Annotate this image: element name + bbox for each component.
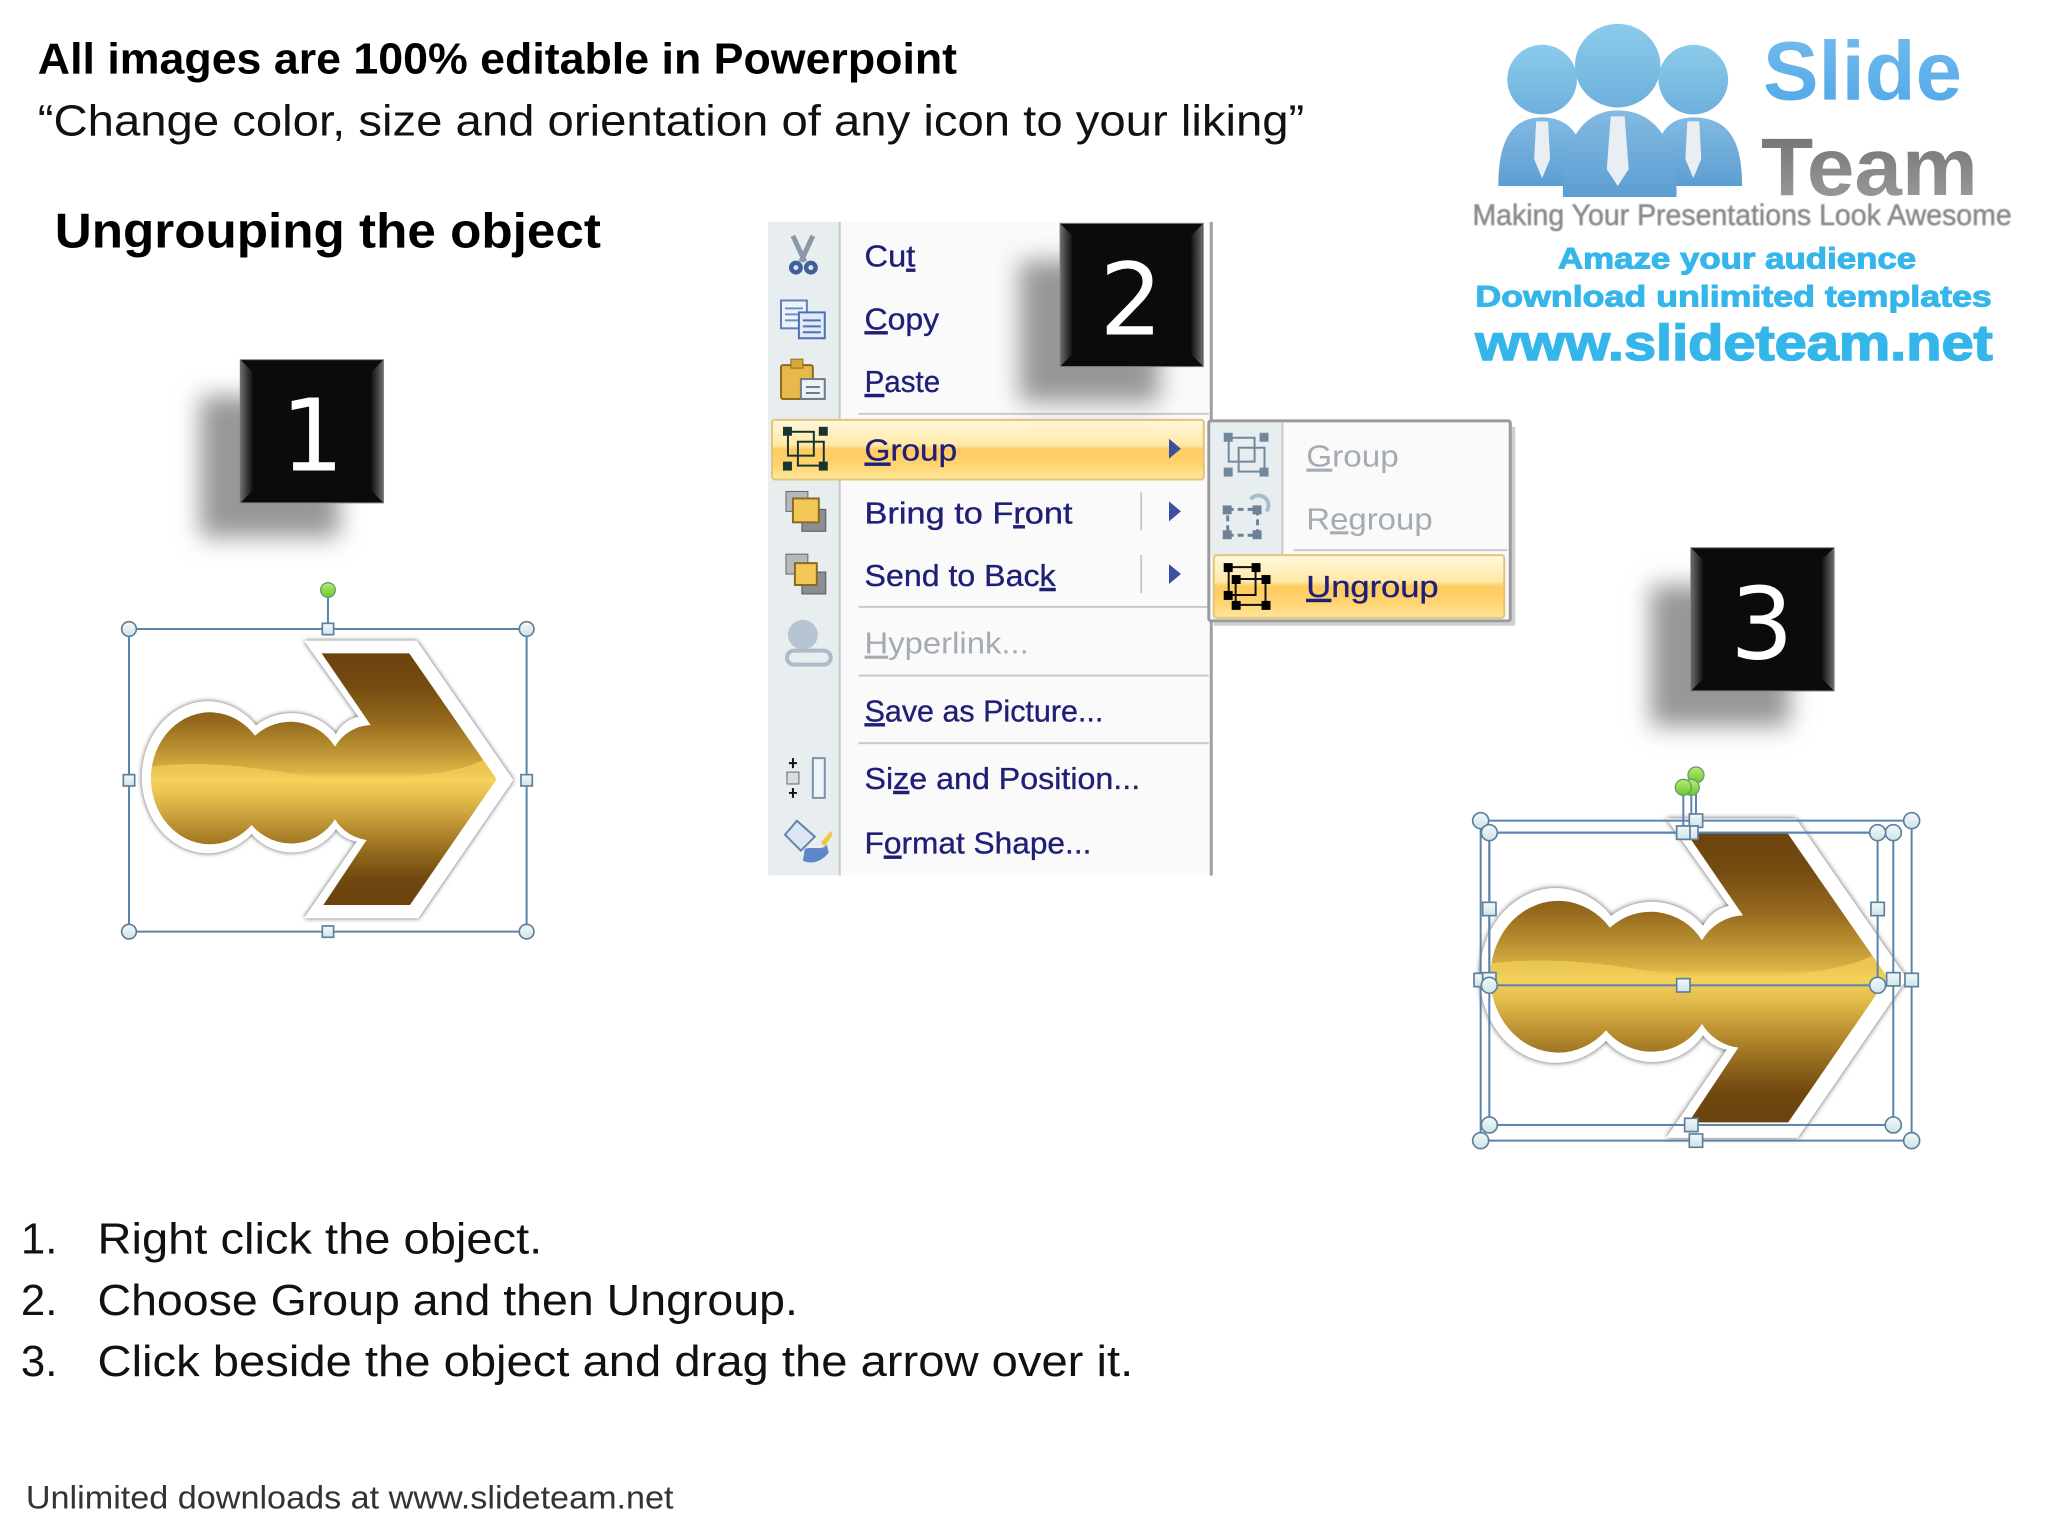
menu items: Bring to F ront bbox=[865, 495, 1073, 530]
instructions list: 2. bbox=[21, 1276, 57, 1325]
highlighted row: Ungroup bbox=[1214, 555, 1504, 618]
instructions list: 3. bbox=[21, 1337, 57, 1386]
submenu arrows bbox=[1169, 439, 1181, 584]
submenu items: Regroup bbox=[1306, 501, 1433, 536]
promo text bbox=[1474, 243, 1993, 371]
heading: editable note bbox=[38, 35, 1304, 145]
icon: format shape bbox=[785, 821, 833, 863]
icon: copy bbox=[781, 300, 825, 338]
menu items: Send to Back bbox=[865, 558, 1056, 593]
menu items: Size and Position... bbox=[865, 761, 1140, 796]
menu items: Hyperlink... bbox=[865, 626, 1029, 661]
menu items: Save as Picture... bbox=[865, 693, 1103, 728]
step badge 1: 1 bbox=[281, 380, 344, 495]
ungrouped arrow with selection frames bbox=[1473, 767, 1920, 1149]
highlighted row: Group bbox=[772, 420, 1204, 480]
step badge 2 bbox=[1020, 223, 1204, 402]
step badge 2: 2 bbox=[1100, 243, 1163, 358]
heading: editable note: All images are 100% editable in Powerpoint bbox=[38, 35, 958, 84]
icon: ungroup bbox=[1224, 563, 1270, 610]
wordmark: Team bbox=[1761, 122, 1978, 213]
icon: size and position bbox=[787, 758, 825, 798]
promo text: Amaze your audience bbox=[1558, 243, 1916, 276]
grouped arrow with selection frame bbox=[122, 583, 534, 939]
icon: group disabled bbox=[1224, 433, 1268, 477]
menu items: Cut bbox=[865, 239, 916, 274]
icon: group bbox=[783, 427, 828, 471]
menu items: Format Shape... bbox=[865, 826, 1091, 861]
tagline: Making Your Presentations Look Awesome bbox=[1472, 199, 2012, 232]
instructions list: Right click the object. bbox=[98, 1215, 542, 1264]
submenu bbox=[1209, 421, 1515, 626]
icon: hyperlink bbox=[787, 620, 831, 665]
submenu items bbox=[1306, 439, 1439, 604]
instructions list: 1. bbox=[21, 1215, 57, 1264]
menu items: Group bbox=[865, 433, 957, 468]
promo text: www.slideteam.net bbox=[1474, 315, 1993, 371]
icon: bring to front bbox=[786, 491, 826, 531]
menu items: Paste bbox=[865, 364, 940, 399]
icon: send to back bbox=[786, 554, 826, 594]
step badge 3 bbox=[1651, 547, 1835, 726]
instructions list: Choose Group and then Ungroup. bbox=[98, 1276, 798, 1325]
menu items bbox=[865, 239, 1140, 861]
instructions list bbox=[21, 1215, 1133, 1386]
submenu items: Group bbox=[1306, 439, 1399, 474]
step badge 1 bbox=[200, 359, 384, 537]
footer: Unlimited downloads at www.slideteam.net bbox=[26, 1478, 674, 1515]
promo text: Download unlimited templates bbox=[1475, 280, 1992, 313]
logo: SlideTeam bbox=[1472, 23, 2012, 371]
title: Ungrouping the object bbox=[55, 205, 601, 259]
instructions list: Click beside the object and drag the arrow over it. bbox=[98, 1337, 1133, 1386]
icon: three people bbox=[1498, 24, 1742, 197]
icon: scissors bbox=[789, 236, 818, 275]
heading: editable note: “Change color, size and orientation of any icon to your liking” bbox=[38, 96, 1304, 145]
context menu bbox=[768, 222, 1213, 876]
step badge 3: 3 bbox=[1730, 568, 1794, 683]
menu items: Copy bbox=[865, 301, 940, 336]
wordmark bbox=[1761, 23, 1978, 213]
icon: regroup disabled bbox=[1223, 495, 1268, 539]
icon: paste bbox=[781, 359, 825, 399]
wordmark: Slide bbox=[1763, 23, 1962, 117]
submenu items: Ungroup bbox=[1306, 569, 1439, 604]
